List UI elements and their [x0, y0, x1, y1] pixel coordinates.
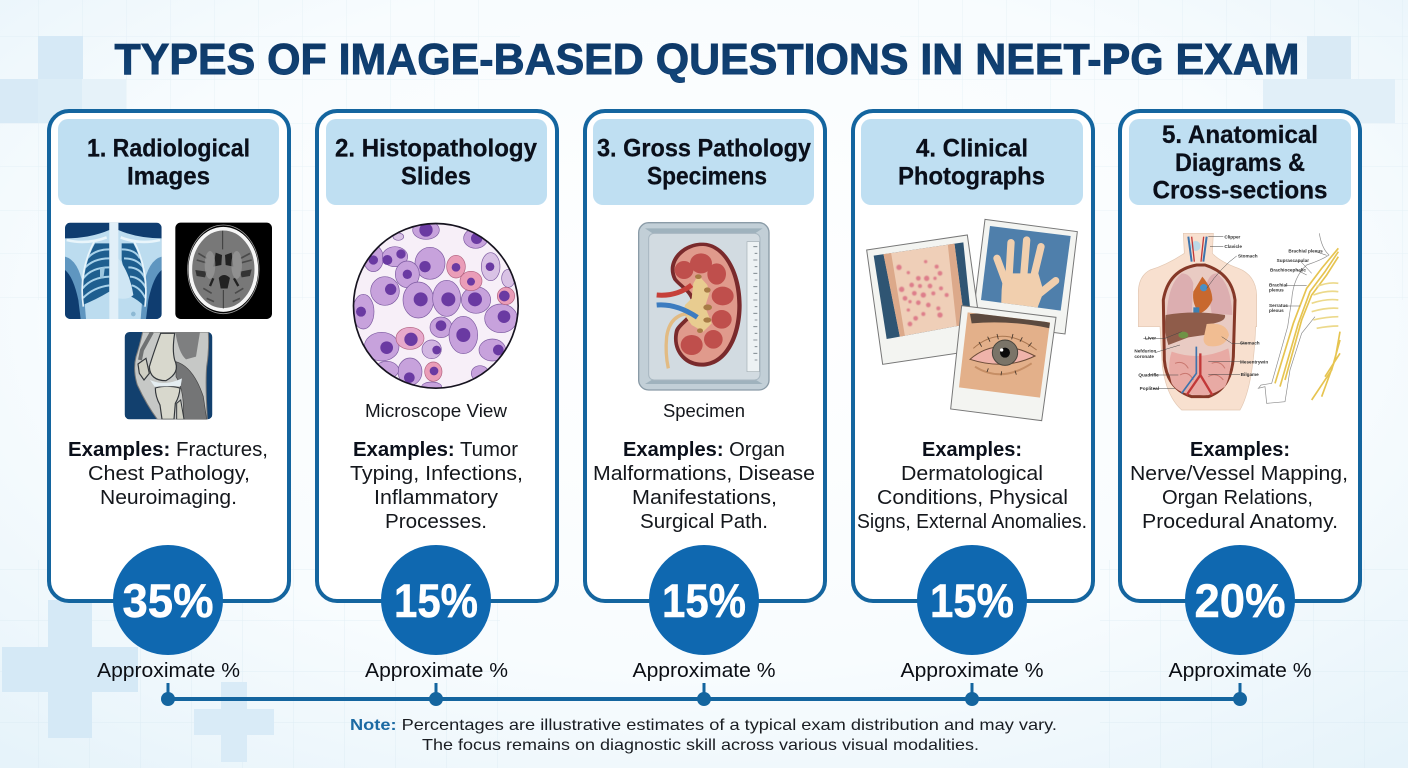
header: gross pathology specimens: Specimens — [647, 162, 767, 190]
panel: clinical photographs — [853, 111, 1093, 682]
arm nerve map: Suprascapular — [1277, 258, 1309, 263]
arm nerve map: Brachial — [1269, 282, 1287, 287]
examples text — [857, 439, 1087, 533]
percentage badge: 35%: 35% — [122, 574, 214, 627]
percentage badge: 15% — [381, 545, 491, 655]
panel: anatomical diagrams and cross-sections — [1120, 111, 1360, 682]
polaroid: red eye — [951, 306, 1056, 421]
percentage badge: 15%: 15% — [930, 574, 1014, 627]
examples text — [350, 439, 523, 533]
header: radiological images: 1. Radiological — [87, 134, 250, 162]
percentage badge: 35% — [113, 545, 223, 655]
torso anatomy: coronate — [1134, 354, 1154, 359]
header: anatomical diagrams: Cross-sections — [1152, 176, 1328, 204]
torso anatomy: Nefdurion — [1134, 349, 1156, 354]
card frame — [585, 111, 825, 601]
torso anatomy: Clipper — [1224, 235, 1241, 240]
header: radiological images — [58, 119, 279, 205]
examples text: Malformations, Disease — [593, 463, 815, 485]
card frame — [1120, 111, 1360, 601]
icon: kidney specimen on tray — [639, 223, 769, 390]
header: gross pathology specimens — [593, 119, 814, 205]
examples text: Examples: Organ — [623, 439, 785, 461]
percentage caption: Approximate % — [1168, 659, 1312, 682]
torso anatomy: Mesentrywin — [1240, 359, 1268, 364]
torso anatomy: Popliteal — [1140, 386, 1159, 391]
header: histopathology slides — [326, 119, 547, 205]
percentage badge: 15% — [917, 545, 1027, 655]
arm nerve map: plexus — [1269, 308, 1284, 313]
percentage badge: 20%: 20% — [1194, 574, 1286, 627]
header: anatomical diagrams: 5. Anatomical — [1162, 121, 1318, 149]
percentage caption: Approximate % — [900, 659, 1044, 682]
torso anatomy — [1134, 233, 1268, 410]
card frame — [317, 111, 557, 601]
header: anatomical diagrams — [1129, 119, 1351, 205]
torso anatomy: Bilgame — [1241, 372, 1259, 377]
card frame — [853, 111, 1093, 601]
arm nerve map — [1258, 233, 1340, 403]
card frame — [49, 111, 289, 601]
panel: radiological images — [49, 111, 289, 682]
arm nerve map: Brachiocephalic — [1270, 268, 1306, 273]
torso anatomy: Clavicle — [1224, 244, 1242, 249]
header: clinical photographs: 4. Clinical — [916, 134, 1028, 162]
icon: knee MRI — [125, 332, 212, 419]
header: anatomical diagrams: Diagrams & — [1175, 149, 1305, 177]
panel: histopathology slides — [317, 111, 557, 682]
image caption: Specimen — [663, 401, 745, 421]
torso anatomy: Quadrifle — [1138, 373, 1159, 378]
examples text: Organ Relations, — [1162, 487, 1313, 509]
arm nerve map: plexus — [1269, 287, 1284, 292]
percentage badge: 20% — [1185, 545, 1295, 655]
icon: torso organs and arm nerve diagram — [1134, 233, 1340, 410]
image caption: Microscope View — [365, 401, 508, 421]
title: TYPES OF IMAGE-BASED QUESTIONS IN NEET-PG EXAM — [114, 36, 1300, 84]
header: histopathology slides: 2. Histopathology — [335, 134, 537, 162]
header: histopathology slides: Slides — [401, 162, 471, 190]
header: clinical photographs — [861, 119, 1083, 205]
header: gross pathology specimens: 3. Gross Pathology — [597, 134, 811, 162]
examples text: Examples: — [922, 439, 1022, 461]
examples text: Inflammatory — [374, 487, 498, 509]
footnote: Note: Percentages are illustrative estimates of a typical exam distribution and may vary. — [350, 717, 1057, 734]
timeline connecting the percentages — [161, 683, 1247, 706]
percentage badge: 15%: 15% — [394, 574, 478, 627]
examples text: Chest Pathology, — [88, 463, 250, 485]
torso anatomy: Stomach — [1240, 341, 1260, 346]
examples text: Surgical Path. — [640, 511, 768, 533]
footnote — [350, 717, 1057, 754]
examples text: Neuroimaging. — [100, 487, 237, 509]
header: clinical photographs: Photographs — [898, 162, 1045, 190]
polaroid: skin rash — [867, 235, 983, 364]
torso anatomy: Stomach — [1238, 253, 1258, 258]
examples text: Examples: Tumor — [353, 439, 518, 461]
examples text: Typing, Infections, — [350, 463, 523, 485]
percentage badge: 15%: 15% — [662, 574, 746, 627]
examples text: Signs, External Anomalies. — [857, 511, 1087, 533]
examples text: Examples: — [1190, 439, 1290, 461]
icon: polaroids of rash, hand and eye — [867, 219, 1077, 421]
icon: microscope view of cells — [353, 221, 518, 391]
percentage caption: Approximate % — [97, 659, 240, 682]
panel: gross pathology specimens — [585, 111, 825, 682]
examples text: Procedural Anatomy. — [1142, 511, 1338, 533]
footnote: The focus remains on diagnostic skill across various visual modalities. — [422, 737, 979, 754]
polaroid: hand — [972, 219, 1077, 334]
percentage caption: Approximate % — [632, 659, 776, 682]
examples text — [1130, 439, 1348, 533]
examples text: Nerve/Vessel Mapping, — [1130, 463, 1348, 485]
percentage badge: 15% — [649, 545, 759, 655]
examples text: Examples: Fractures, — [68, 439, 268, 461]
arm nerve map: Serratus — [1269, 303, 1288, 308]
examples text: Manifestations, — [632, 487, 777, 509]
examples text: Processes. — [385, 511, 487, 533]
icon: chest x-ray — [65, 223, 162, 319]
header: radiological images: Images — [127, 162, 210, 190]
examples text — [593, 439, 815, 533]
icon: brain CT scan — [175, 223, 272, 319]
torso anatomy: Liver — [1145, 336, 1156, 341]
examples text: Conditions, Physical — [877, 487, 1068, 509]
arm nerve map: Brachial plexus — [1288, 249, 1323, 254]
percentage caption: Approximate % — [365, 659, 508, 682]
examples text — [68, 439, 268, 509]
examples text: Dermatological — [901, 463, 1043, 485]
